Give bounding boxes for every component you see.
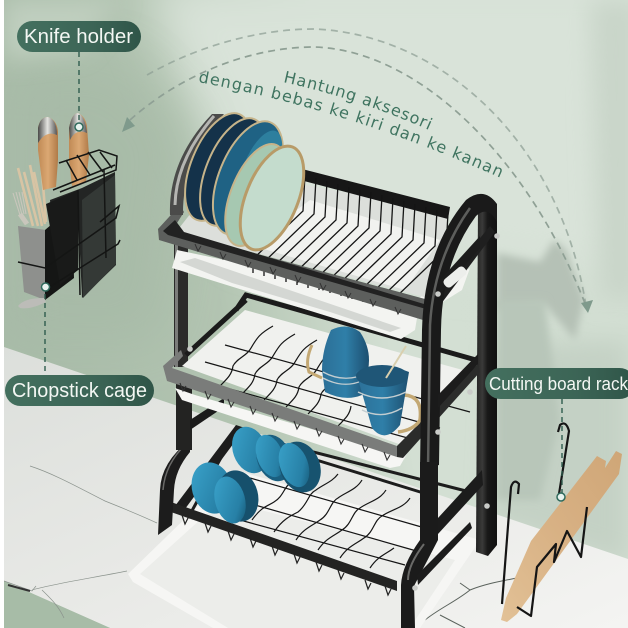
front left upright (174, 232, 224, 450)
bottom shelf (168, 425, 470, 595)
chopstick box (18, 226, 46, 300)
rear rails (186, 295, 476, 360)
hooks (182, 515, 391, 595)
shelf floor seen through wires (176, 170, 450, 298)
knife left (38, 117, 58, 190)
cutting board rack accessory (501, 423, 622, 622)
side braces (438, 354, 478, 408)
icon: arrow head right (581, 300, 593, 313)
teal plate (199, 112, 297, 244)
hooks (180, 383, 390, 460)
rear rail (302, 169, 450, 219)
pill: cutting board rack (485, 368, 628, 399)
knife block (50, 172, 116, 298)
lower curve leg (401, 462, 438, 628)
hooks (195, 244, 401, 314)
chopsticks (18, 160, 46, 226)
crossbars (188, 432, 470, 518)
front rim (163, 350, 397, 457)
navy plate two (187, 109, 279, 235)
pill: knife holder: Knife holder (24, 26, 133, 48)
cups (308, 326, 420, 435)
cutting board (501, 451, 622, 622)
marker dots (42, 123, 565, 501)
rear posts (476, 205, 497, 556)
top shelf (158, 169, 495, 320)
top white tray (172, 250, 470, 339)
bottom rim (168, 501, 397, 591)
handle of top tray (442, 265, 468, 289)
dashed double arc with arrows (122, 29, 593, 313)
stacked plates (172, 104, 317, 259)
front rim (158, 205, 432, 320)
pill: chopstick cage: Chopstick cage (12, 380, 147, 402)
lower left arch (158, 440, 190, 535)
hooks and wire stand (502, 423, 587, 616)
middle white tray (175, 310, 470, 468)
tine wires (253, 175, 448, 311)
curved caption: Hantung aksesori (284, 71, 433, 130)
bowls (186, 422, 328, 527)
foot (18, 298, 46, 308)
bottom white tray (128, 470, 480, 628)
back cup (308, 326, 369, 398)
pill: chopstick cage (5, 375, 154, 406)
front cup (356, 346, 420, 435)
wavy wires (190, 326, 470, 440)
middle shelf (163, 295, 480, 460)
pale green plate (213, 136, 299, 254)
white margin (0, 0, 4, 628)
pill: knife holder (17, 21, 141, 52)
fork (13, 192, 27, 224)
bolts (494, 233, 500, 239)
navy plate one (172, 104, 264, 230)
wavy wires (220, 468, 425, 568)
front pale plate (227, 137, 317, 259)
icon: arrow head left (122, 117, 135, 132)
marble counter (4, 347, 628, 628)
front right post and arch (187, 194, 500, 628)
knife holder accessory (13, 113, 120, 308)
knife right (69, 113, 89, 186)
curved caption: dengan bebas ke kiri dan ke kanan (200, 71, 502, 178)
rack shadow on wall (490, 240, 628, 565)
wire cage (18, 150, 120, 295)
rear plate holder arc (170, 114, 224, 215)
leader lines (45, 52, 562, 495)
